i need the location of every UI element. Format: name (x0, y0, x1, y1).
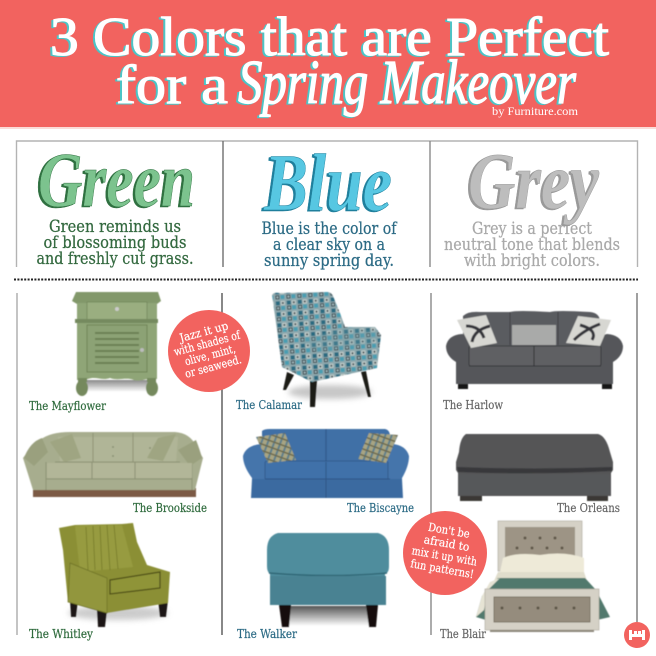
title line 2 (116, 49, 577, 117)
panel: blue (262, 137, 398, 270)
callout: mix patterns: Don't be (427, 520, 471, 541)
dotted divider (14, 278, 638, 280)
label: The Mayflower: The Mayflower (29, 398, 106, 413)
title line 1: 3 Colors that are Perfect (50, 6, 609, 67)
label: The Orleans: The Orleans (557, 500, 620, 515)
panel: green (36, 136, 195, 268)
product: The Whitley chair (59, 523, 170, 627)
grey description: with bright colors. (464, 251, 600, 270)
heading: Blue: Blue (263, 137, 392, 228)
grey description: Grey is a perfect (472, 219, 592, 238)
title line 2: for a (116, 54, 228, 115)
green description: Green reminds us (49, 217, 181, 236)
label: The Whitley: The Whitley (29, 626, 94, 641)
callout: mix patterns: mix it up with (411, 543, 479, 569)
panel: grey (444, 138, 620, 270)
callout: jazz it up: olive, mint, (183, 341, 237, 368)
product: The Orleans ottoman (456, 434, 613, 501)
product: The Blair bed (476, 521, 610, 632)
byline: by Furniture.com (492, 106, 578, 118)
product: The Brookside sofa (23, 432, 203, 497)
heading: Green: Green (38, 136, 195, 223)
callout: jazz it up: or seaweed. (183, 352, 243, 381)
product: The Calamar chair (272, 292, 381, 407)
column rules: products (17, 293, 637, 635)
header banner (0, 0, 656, 129)
grey description (444, 219, 620, 270)
callout: mix patterns: afraid to (423, 532, 471, 554)
callout: jazz it up (168, 310, 250, 392)
blue description: sunny spring day. (264, 251, 394, 270)
product: The Biscayne sofa (243, 429, 409, 498)
label: The Harlow: The Harlow (443, 397, 503, 412)
label: The Biscayne: The Biscayne (347, 500, 414, 515)
product: The Mayflower nightstand (72, 292, 161, 396)
callout: jazz it up: with shades of (172, 328, 242, 359)
product: The Walker ottoman (267, 533, 389, 627)
blue description (262, 219, 398, 270)
panel frame: color columns (16, 141, 638, 267)
green description (36, 217, 194, 268)
product: The Harlow sofa (446, 311, 623, 389)
green description: and freshly cut grass. (36, 249, 194, 268)
callout: mix patterns (403, 511, 487, 595)
title line 2: Spring Makeover (238, 49, 577, 117)
label: The Walker: The Walker (237, 626, 297, 641)
callout: mix patterns: fun patterns! (409, 556, 475, 581)
grey description: neutral tone that blends (444, 235, 620, 254)
green description: of blossoming buds (44, 233, 186, 252)
label: The Calamar: The Calamar (236, 397, 302, 412)
blue description: a clear sky on a (273, 235, 385, 254)
blue description: Blue is the color of (262, 219, 398, 238)
callout: jazz it up: Jazz it up (177, 318, 230, 345)
icon: furniture logo badge (624, 622, 650, 648)
label: The Brookside: The Brookside (133, 500, 207, 515)
heading: Grey: Grey (468, 138, 599, 226)
label: The Blair: The Blair (440, 626, 486, 641)
